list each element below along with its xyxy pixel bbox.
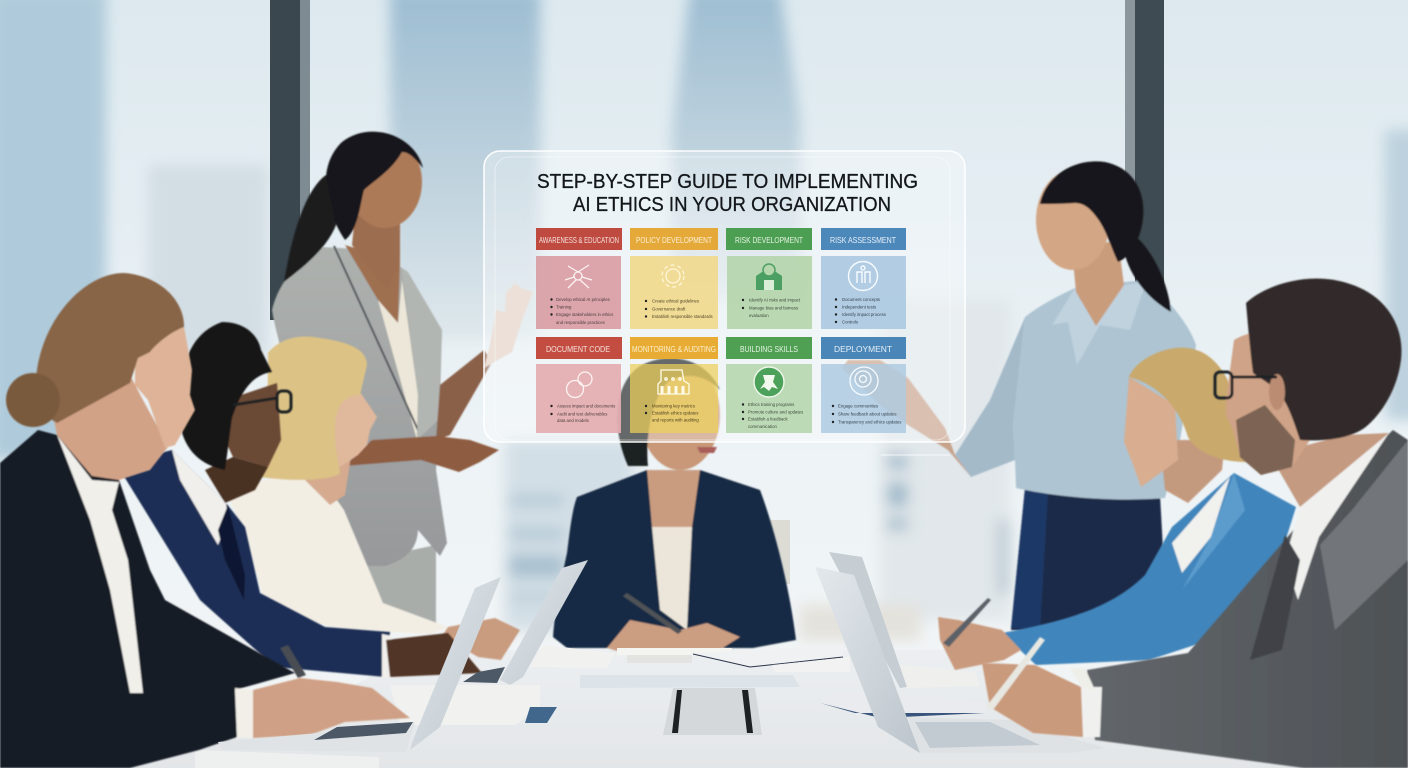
bullet list: Manage bias and fairness <box>749 306 798 310</box>
card: document code <box>536 337 622 433</box>
bullet list <box>832 404 901 424</box>
person: standing woman, right <box>842 161 1196 640</box>
icon: green badge <box>754 367 784 397</box>
bullet list: Audit and test deliverables <box>557 412 607 416</box>
person: seated woman, center <box>553 358 796 654</box>
bullet list: Transparency and ethics updates <box>838 420 901 424</box>
bullet list: Monitoring key metrics <box>652 404 695 408</box>
bullet list: communication <box>748 424 778 429</box>
bullet list <box>645 404 699 422</box>
window frame: right column <box>1135 0 1164 350</box>
person: seated man, left <box>122 322 482 678</box>
bullet list: Controls <box>842 320 858 324</box>
icon: people <box>756 264 782 290</box>
person: seated blonde woman, left <box>226 337 520 660</box>
icon: spiral <box>850 367 878 395</box>
bullet list <box>835 297 886 324</box>
title: STEP-BY-STEP GUIDE TO IMPLEMENTING <box>537 170 918 193</box>
card: deployment: DEPLOYMENT <box>834 344 892 354</box>
bullet list: Promote culture and updates <box>748 410 803 414</box>
bullet list: Establish responsible standards <box>652 314 713 319</box>
bullet list: Engage stakeholders in ethics <box>556 312 613 317</box>
card: document code: DOCUMENT CODE <box>546 344 610 354</box>
bullet list: evaluation <box>749 313 769 318</box>
bullet list: data and models <box>557 418 589 423</box>
laptop: right back <box>829 552 980 688</box>
bullet list: Create ethical guidelines <box>652 298 699 304</box>
office chair behind center woman <box>770 520 790 584</box>
bullet list: Develop ethical AI principles <box>556 297 610 302</box>
card: monitoring and auditing: MONITORING & AUDITING <box>632 344 716 354</box>
card: building skills: BUILDING SKILLS <box>740 344 798 354</box>
card: risk assessment <box>821 228 906 329</box>
window frame: left column <box>270 0 300 320</box>
laptop: left back <box>463 560 588 685</box>
bullet list <box>742 298 801 318</box>
bullet list <box>550 404 615 423</box>
laptop: right front <box>815 567 1106 753</box>
bullet list: Assess impact and documents <box>557 404 615 408</box>
icon: dashboard <box>658 370 689 394</box>
card: deployment <box>821 337 906 433</box>
documents on the table <box>195 645 985 768</box>
bullet list: Governance draft <box>652 306 686 312</box>
card: risk development <box>726 228 812 329</box>
glass infographic panel <box>484 151 965 455</box>
bullet list: Engage communities <box>838 404 878 408</box>
person: seated woman with bun, far left <box>0 273 410 768</box>
bullet list: and reports with auditing <box>652 418 699 422</box>
card: risk assessment: RISK ASSESSMENT <box>830 235 896 245</box>
bullet list <box>742 402 803 429</box>
icon: gear <box>662 265 684 287</box>
card: building skills <box>726 337 812 433</box>
icon: network <box>565 265 592 288</box>
bullet list: Training <box>556 304 572 310</box>
bullet list: Ethics training programs <box>748 402 794 407</box>
card: monitoring and auditing <box>630 337 718 433</box>
bullet list: Identify AI risks and impact <box>749 298 801 302</box>
bullet list: and responsible practices <box>556 320 605 325</box>
person: standing woman, left <box>272 132 533 625</box>
bullet list: Independent tests <box>842 304 876 310</box>
card: awareness and education <box>536 228 622 329</box>
card: awareness and education: AWARENESS & EDUCATION <box>539 235 619 245</box>
icon: linked circles <box>566 372 592 398</box>
title: AI ETHICS IN YOUR ORGANIZATION <box>573 193 891 216</box>
person: seated man, far right <box>982 278 1408 768</box>
conference table <box>92 650 1304 768</box>
bullet list: Establish ethics updates <box>652 410 698 416</box>
bullet list: Document concepts <box>842 297 880 302</box>
icon: compliance circle <box>848 262 878 290</box>
card: policy development: POLICY DEVELOPMENT <box>636 235 712 245</box>
person: seated blonde woman, right <box>938 348 1296 670</box>
bullet list: Share feedback about updates <box>838 412 897 416</box>
card: risk development: RISK DEVELOPMENT <box>735 235 803 245</box>
card: policy development <box>630 228 718 329</box>
bullet list: Identify impact process <box>842 312 886 317</box>
bullet list <box>645 298 713 319</box>
bullet list <box>550 297 613 325</box>
laptop: left front <box>218 577 501 752</box>
title <box>537 170 918 216</box>
bullet list: Establish a feedback <box>748 416 789 422</box>
